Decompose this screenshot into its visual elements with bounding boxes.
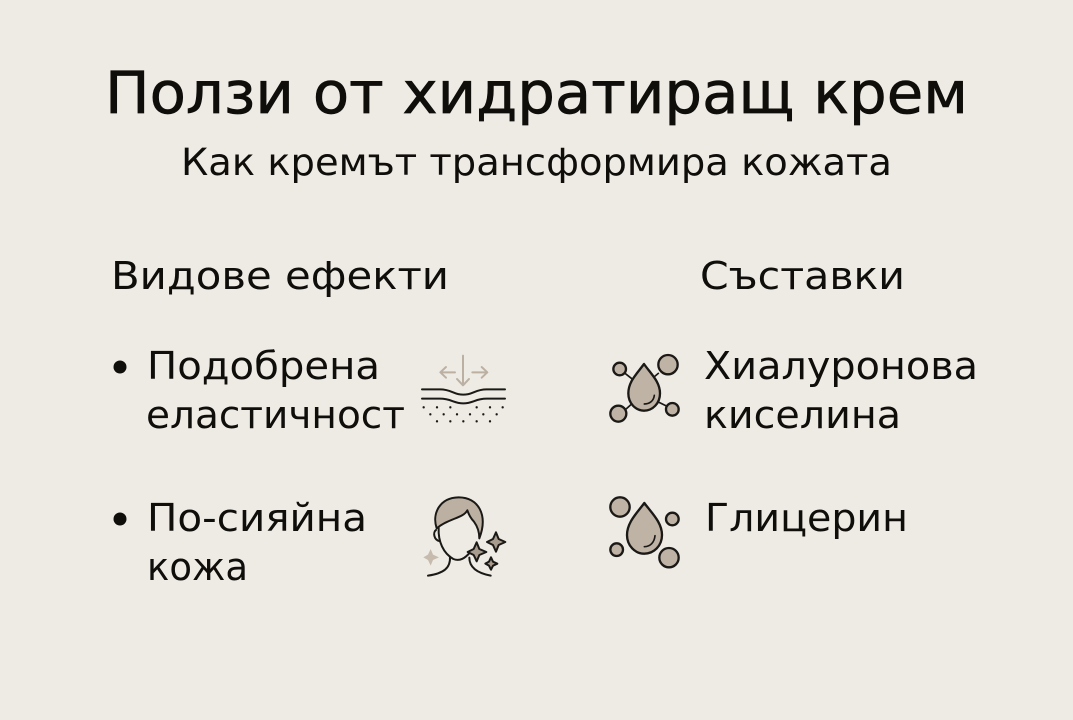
list item: hyaluronic acid [704,344,978,437]
icon: drop with molecule [610,355,679,422]
title: Ползи от хидратиращ крем [105,59,968,127]
icon: drop with bubbles [610,497,679,567]
list item: hyaluronic acid: Хиалуронова [704,344,978,388]
list item: glycerin: Глицерин [705,496,908,540]
list item: elasticity [114,344,405,437]
list item: radiant skin: По-сияйна [147,496,367,540]
subtitle: Как кремът трансформира кожата [181,141,892,184]
list item: elasticity: еластичност [146,393,405,437]
icon: skin pressed with arrows [422,356,505,422]
list item: radiant skin: кожа [147,545,248,589]
heading: ingredients: Съставки [700,254,905,298]
heading: effect types: Видове ефекти [111,254,449,298]
list item: radiant skin [114,496,367,589]
list item: hyaluronic acid: киселина [704,393,901,437]
icon: face with sparkles [423,497,505,576]
list item: elasticity: Подобрена [147,344,380,388]
